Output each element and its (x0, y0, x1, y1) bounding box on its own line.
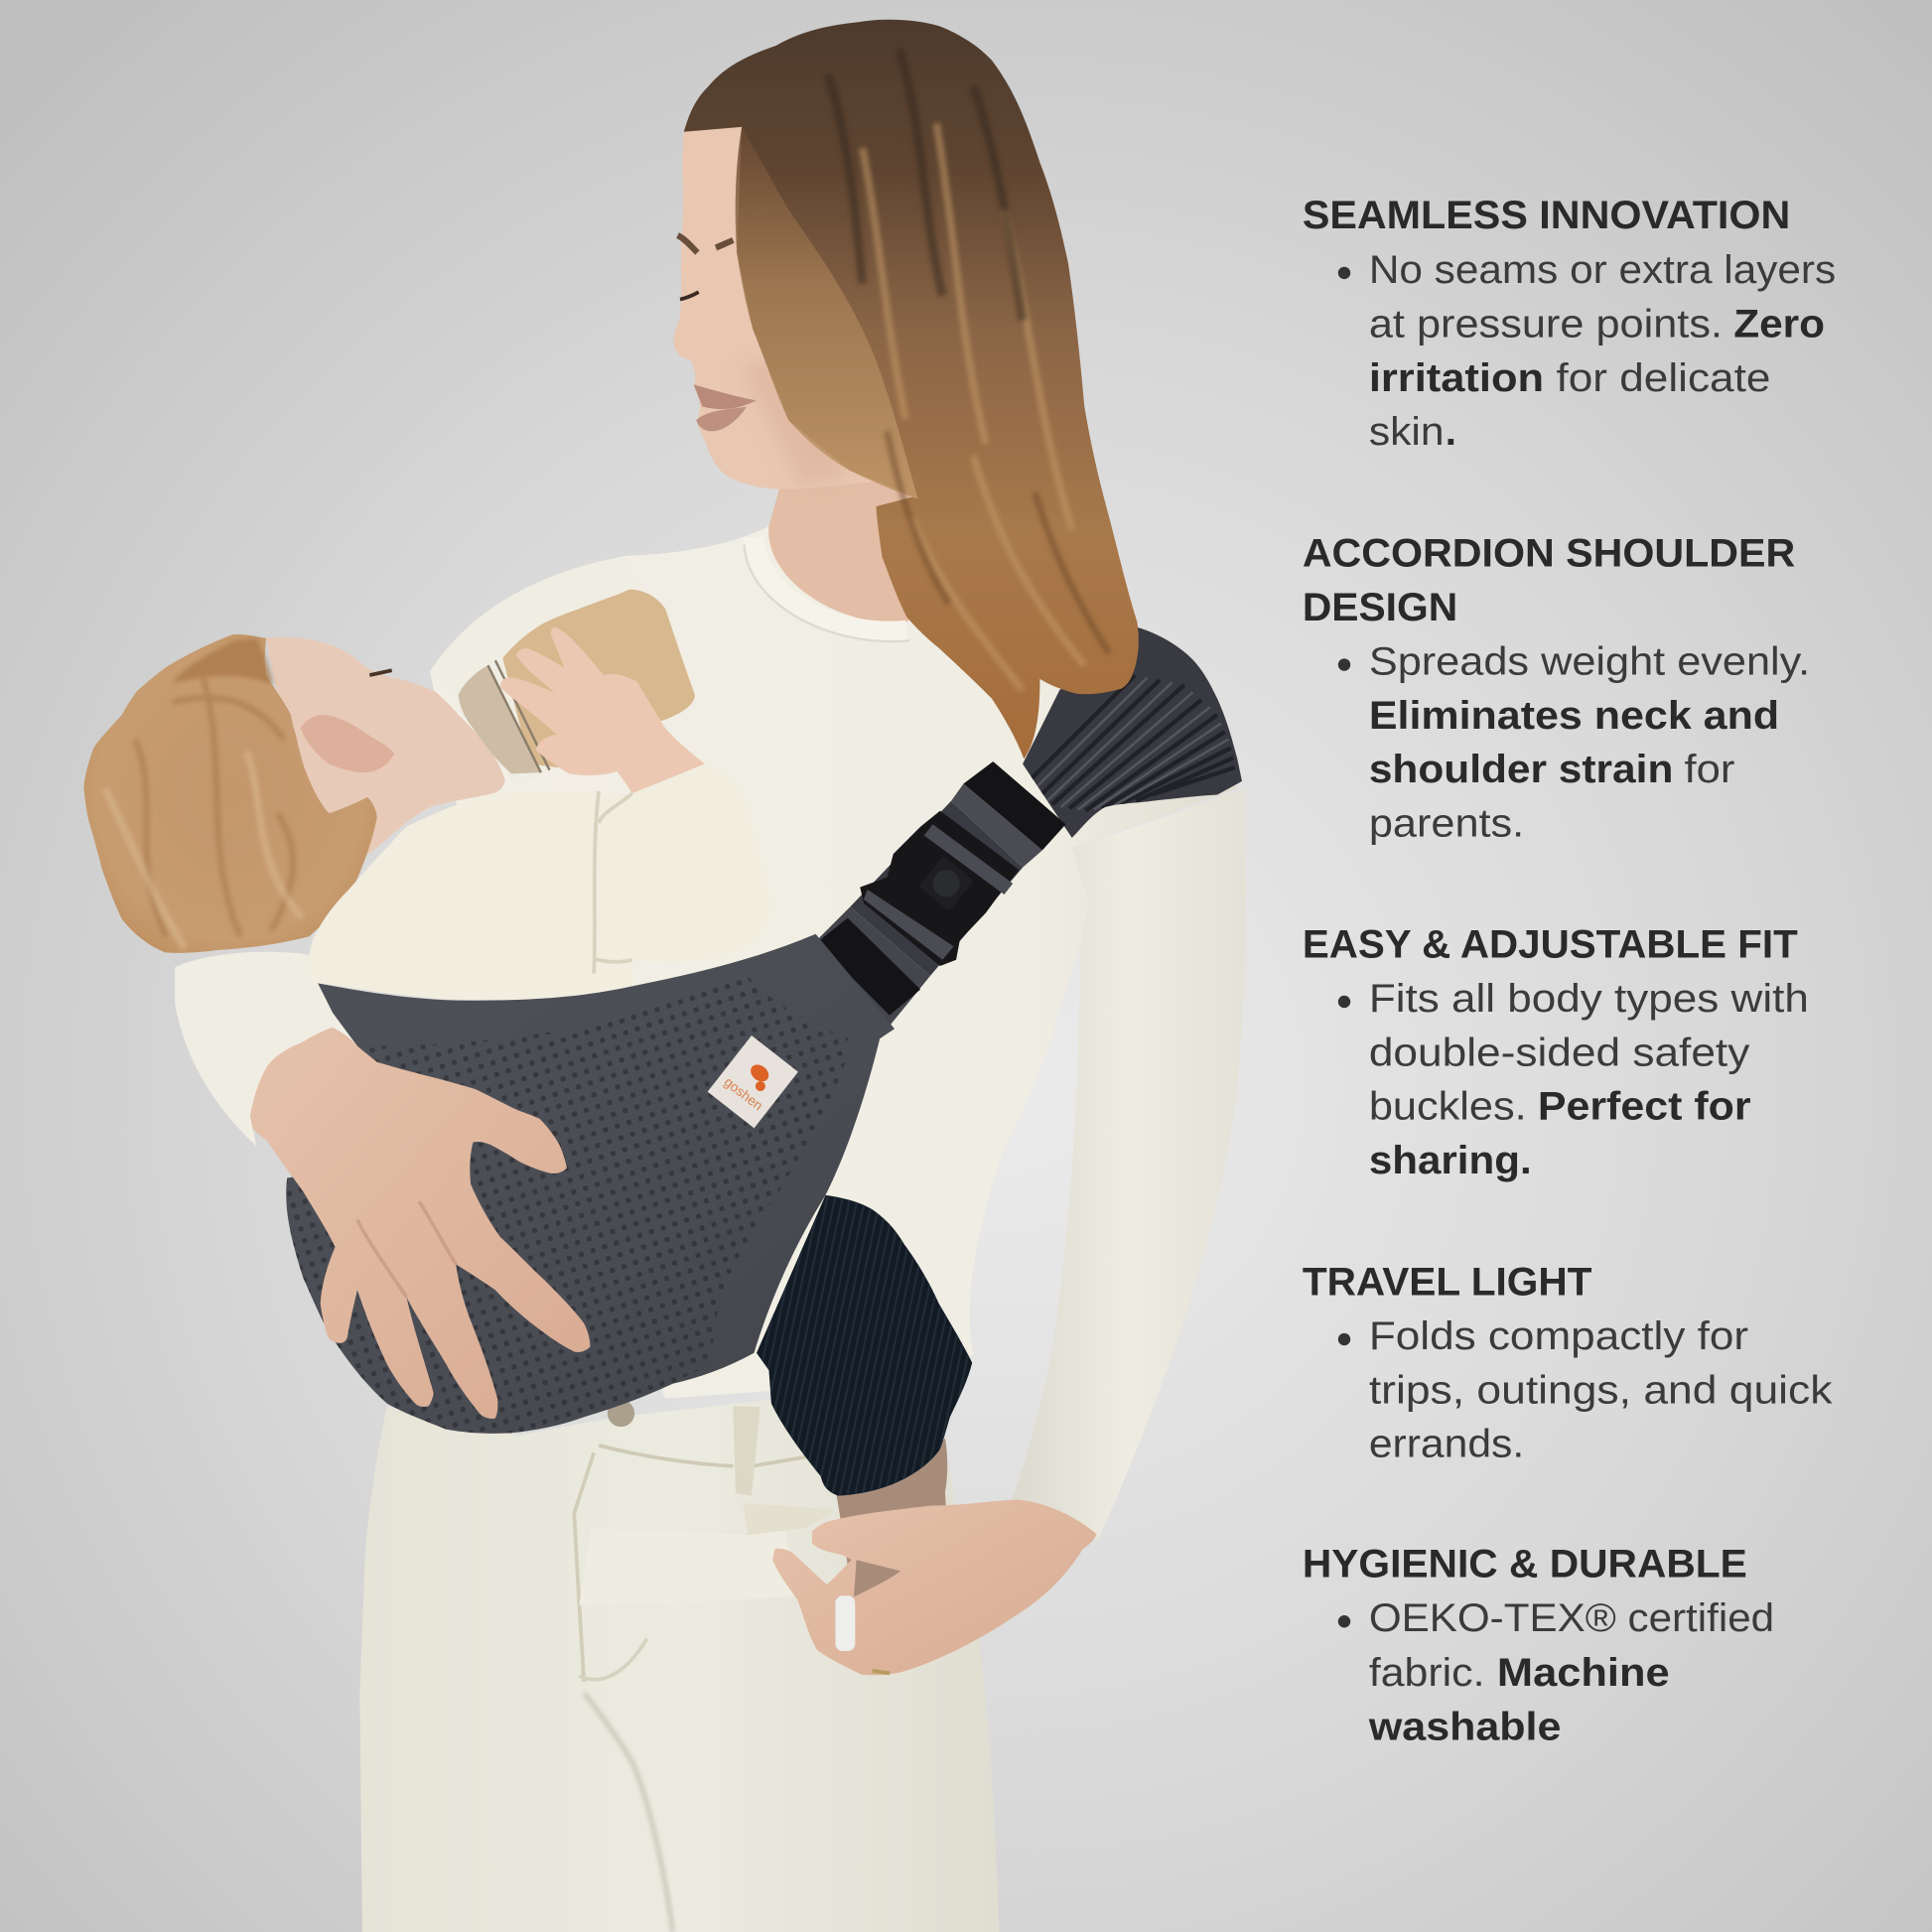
bullet text: easy and adjustable fit: double-sided safety (1369, 1032, 1749, 1075)
bullet text: seamless innovation (1338, 248, 1836, 454)
bullet text: accordion shoulder design: shoulder strain (1369, 748, 1673, 791)
woman's face (674, 104, 888, 489)
feature: hygienic and durable (1303, 1543, 1774, 1748)
photo: mother carrying baby in sling (83, 20, 1246, 1932)
bullet text: easy and adjustable fit: buckles. (1369, 1085, 1527, 1129)
woman's lower hand (772, 1499, 1097, 1675)
bullet text: travel light: errands. (1369, 1423, 1524, 1466)
right sleeve (1011, 788, 1246, 1540)
bullet text: accordion shoulder design (1338, 639, 1810, 846)
woman's hand on sling (250, 1028, 590, 1419)
sling body (286, 934, 895, 1434)
bullet text: seamless innovation: . (1446, 410, 1456, 454)
bullet text: easy and adjustable fit: Fits all body types with (1369, 977, 1809, 1021)
sling brand label (708, 1035, 798, 1128)
baby's sock (837, 1438, 949, 1591)
bullet text: hygienic and durable: Machine (1497, 1651, 1670, 1695)
bullet text: seamless innovation: skin (1369, 410, 1445, 454)
feature: easy and adjustable fit (1303, 922, 1809, 1182)
baby's head with hair (83, 634, 505, 953)
feature: accordion shoulder design (1303, 531, 1810, 846)
bullet text: travel light: Folds compactly for (1369, 1314, 1748, 1358)
bullet text: accordion shoulder design: for (1685, 748, 1734, 791)
feature: travel light (1303, 1260, 1833, 1466)
bullet text: accordion shoulder design: Eliminates neck and (1369, 694, 1779, 738)
bullet text: easy and adjustable fit: sharing. (1369, 1139, 1532, 1182)
bullet text: travel light (1338, 1314, 1833, 1466)
baby's hand (500, 627, 705, 793)
heading: hygienic and durable: HYGIENIC & DURABLE (1303, 1543, 1747, 1587)
bullet text: hygienic and durable: fabric. (1369, 1651, 1484, 1695)
bullet text: seamless innovation: Zero (1733, 302, 1825, 345)
heading: seamless innovation: SEAMLESS INNOVATION (1303, 194, 1790, 237)
bullet text: hygienic and durable (1338, 1596, 1774, 1748)
woman's hair (684, 20, 1139, 759)
bullet text: seamless innovation: No seams or extra layers (1369, 248, 1836, 292)
feature list (1303, 194, 1836, 1748)
woman's neck and collar (745, 456, 936, 641)
sling brand label: goshen (722, 1074, 765, 1113)
feature: seamless innovation (1303, 194, 1836, 454)
heading: accordion shoulder design: ACCORDION SHOULDER (1303, 531, 1795, 575)
trousers (359, 1400, 1000, 1932)
buckle and webbing strap (804, 761, 1066, 1029)
heading: travel light: TRAVEL LIGHT (1303, 1260, 1591, 1304)
feeding bottle (459, 590, 695, 773)
heading: accordion shoulder design (1303, 531, 1795, 629)
bullet text: easy and adjustable fit (1338, 977, 1809, 1182)
bullet text: easy and adjustable fit: Perfect for (1538, 1085, 1751, 1129)
woman's torso in white sweater (430, 526, 1238, 1399)
accordion shoulder pad (1023, 625, 1242, 838)
bullet text: accordion shoulder design: Spreads weight evenly. (1369, 639, 1810, 683)
facial features (678, 235, 850, 486)
bullet text: travel light: trips, outings, and quick (1369, 1369, 1833, 1413)
bullet text: seamless innovation: at pressure points. (1369, 302, 1723, 345)
baby's leg in corduroy (757, 1195, 972, 1496)
bullet text: seamless innovation: irritation (1369, 356, 1544, 400)
heading: accordion shoulder design: DESIGN (1303, 586, 1457, 629)
bullet text: accordion shoulder design: parents. (1369, 802, 1524, 846)
left sleeve behind baby (175, 556, 690, 1146)
bullet text: seamless innovation: for delicate (1556, 356, 1770, 400)
bullet text: hygienic and durable: washable (1368, 1705, 1561, 1748)
baby's body in cream onesie (309, 763, 771, 1000)
heading: easy and adjustable fit: EASY & ADJUSTABLE FIT (1303, 922, 1798, 966)
bullet text: hygienic and durable: OEKO-TEX® certified (1369, 1596, 1774, 1640)
